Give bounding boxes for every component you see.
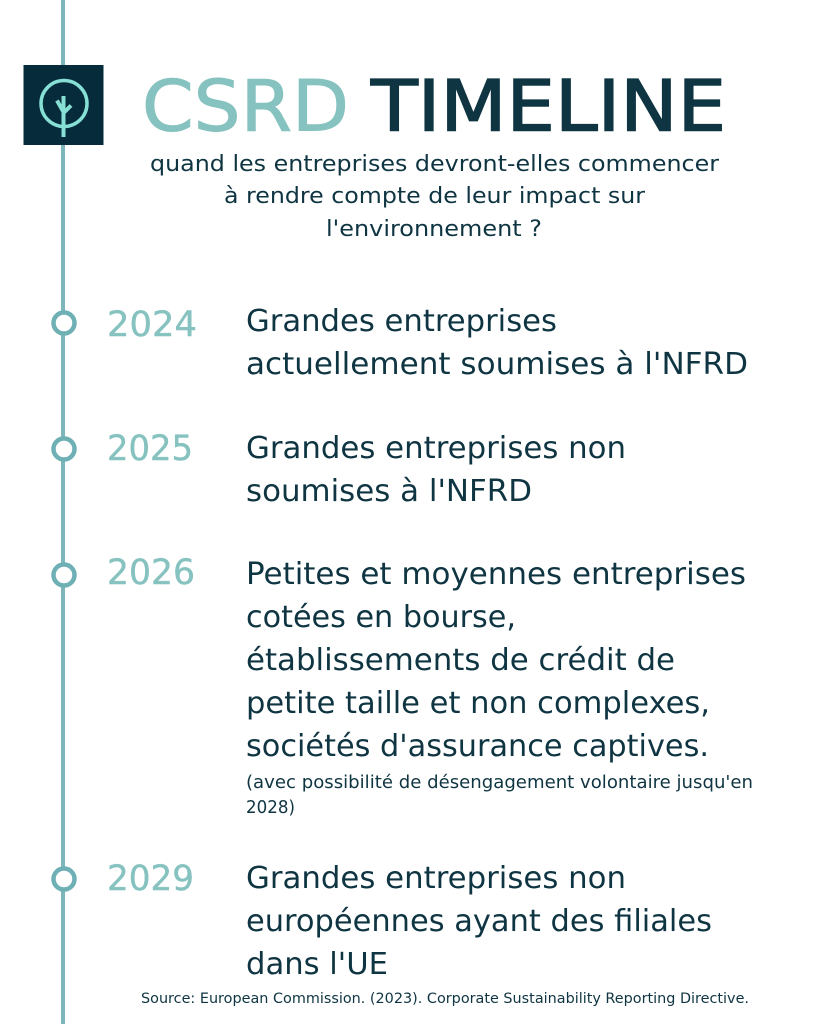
- timeline line: [61, 0, 65, 1024]
- entry: 2029: européennes ayant des filiales: [246, 904, 712, 939]
- subtitle: quand les entreprises devront-elles commencer: [150, 152, 720, 177]
- entry: 2024: [54, 304, 748, 382]
- entry: 2029: 2029: [107, 859, 194, 899]
- entry: 2029: dans l'UE: [246, 947, 388, 982]
- entry: 2025: Grandes entreprises non: [246, 431, 626, 466]
- entry: 2026: (avec possibilité de désengagement volontaire jusqu'en: [246, 773, 753, 793]
- title: TIMELINE: [370, 66, 726, 148]
- entry: 2026: petite taille et non complexes,: [246, 686, 710, 721]
- entry: 2025: soumises à l'NFRD: [246, 474, 532, 509]
- title: CSRD: [142, 66, 349, 148]
- subtitle: à rendre compte de leur impact sur: [224, 184, 646, 209]
- entry: 2029: Grandes entreprises non: [246, 861, 626, 896]
- source note: Source: European Commission. (2023). Corporate Sustainability Reporting Directive.: [141, 991, 749, 1007]
- entry: 2026: établissements de crédit de: [246, 643, 675, 678]
- entry: 2026: Petites et moyennes entreprises: [246, 557, 746, 592]
- entry: 2026: [54, 553, 753, 818]
- title: [142, 66, 726, 148]
- entry: 2026: 2026: [107, 553, 195, 593]
- icon: tree logo: [24, 65, 104, 145]
- entry: 2024: Grandes entreprises: [246, 304, 557, 339]
- entry: 2026: cotées en bourse,: [246, 600, 516, 635]
- entry: 2025: 2025: [107, 429, 193, 469]
- entry: 2026: 2028): [246, 798, 295, 818]
- entry: 2025: [54, 429, 626, 509]
- entry: 2029: [54, 859, 712, 982]
- entry: 2026: sociétés d'assurance captives.: [246, 729, 709, 764]
- entry: 2024: actuellement soumises à l'NFRD: [246, 347, 748, 382]
- subtitle: l'environnement ?: [326, 217, 542, 242]
- entry: 2024: 2024: [107, 305, 197, 345]
- subtitle: [150, 152, 720, 242]
